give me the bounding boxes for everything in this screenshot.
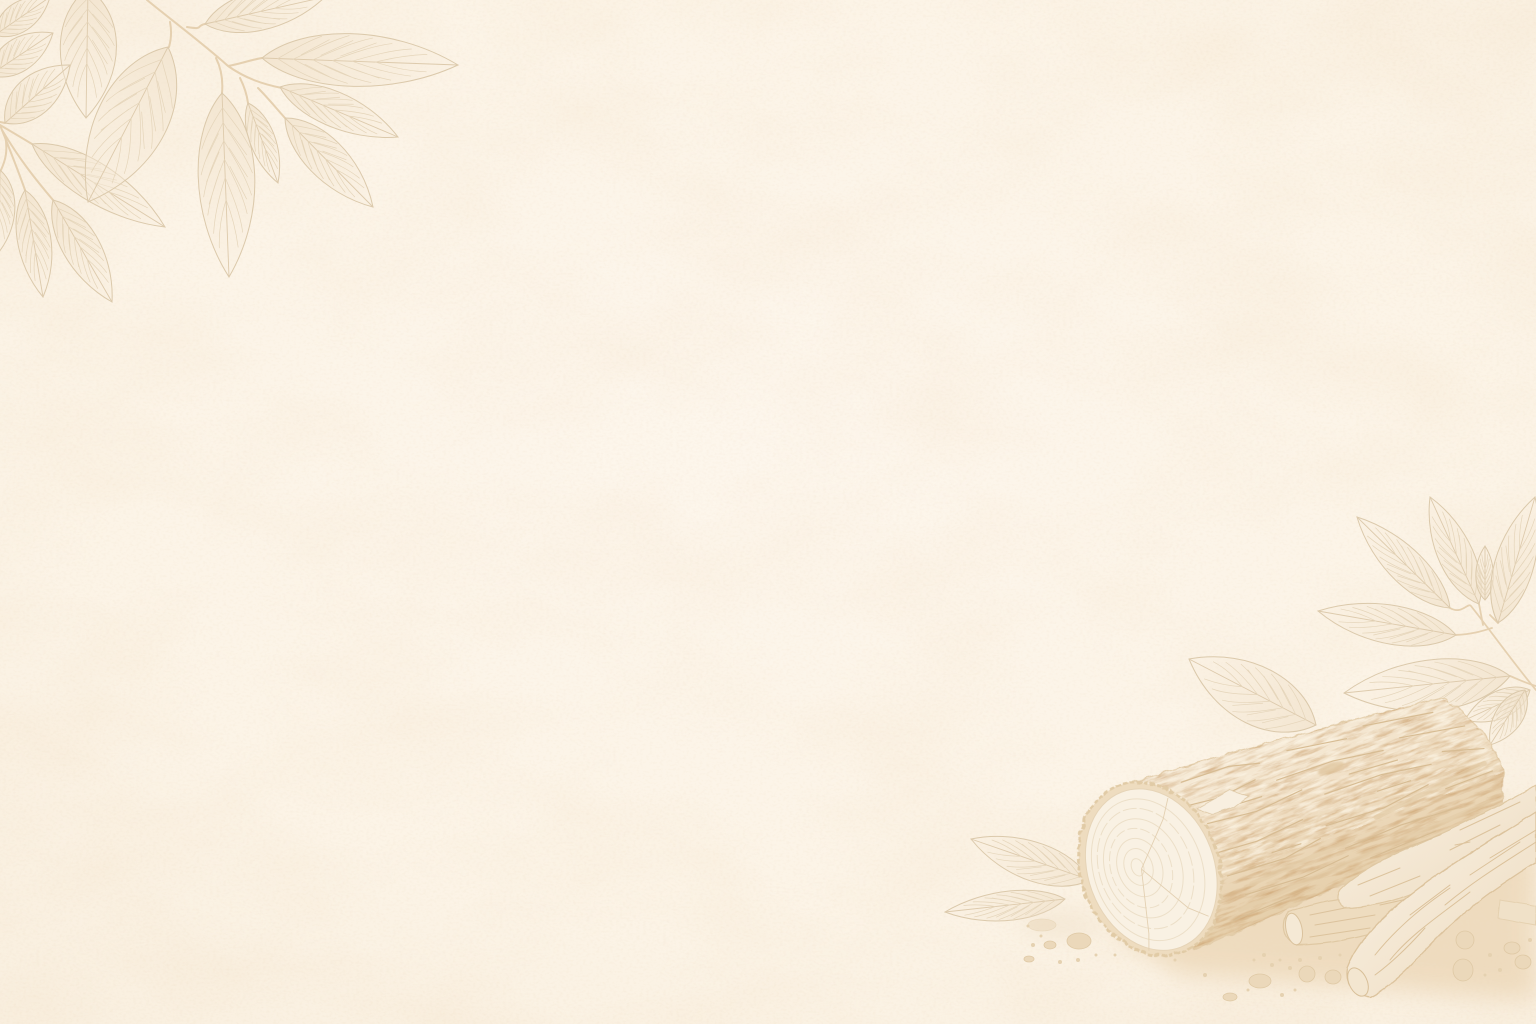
top-left leafy branch <box>0 0 459 311</box>
cut end rim <box>1054 761 1246 977</box>
bark texture <box>1140 698 1504 950</box>
log body <box>1119 657 1525 955</box>
upper root stick <box>1337 785 1536 908</box>
leaves <box>0 0 459 311</box>
log with bark <box>1076 698 1506 958</box>
branch stem <box>1450 604 1536 690</box>
root stick behind right <box>1498 900 1536 925</box>
bark flake <box>1196 789 1250 815</box>
large root stick <box>1344 812 1536 999</box>
ground shadow <box>1020 800 1536 1000</box>
scattered soil and pebbles <box>1024 919 1532 1001</box>
leaves <box>944 490 1536 927</box>
bottom-right leafy branch behind log <box>944 490 1536 927</box>
lower short root stick <box>1283 885 1430 946</box>
cut end with growth rings <box>1063 770 1240 970</box>
branch stems <box>0 0 285 200</box>
